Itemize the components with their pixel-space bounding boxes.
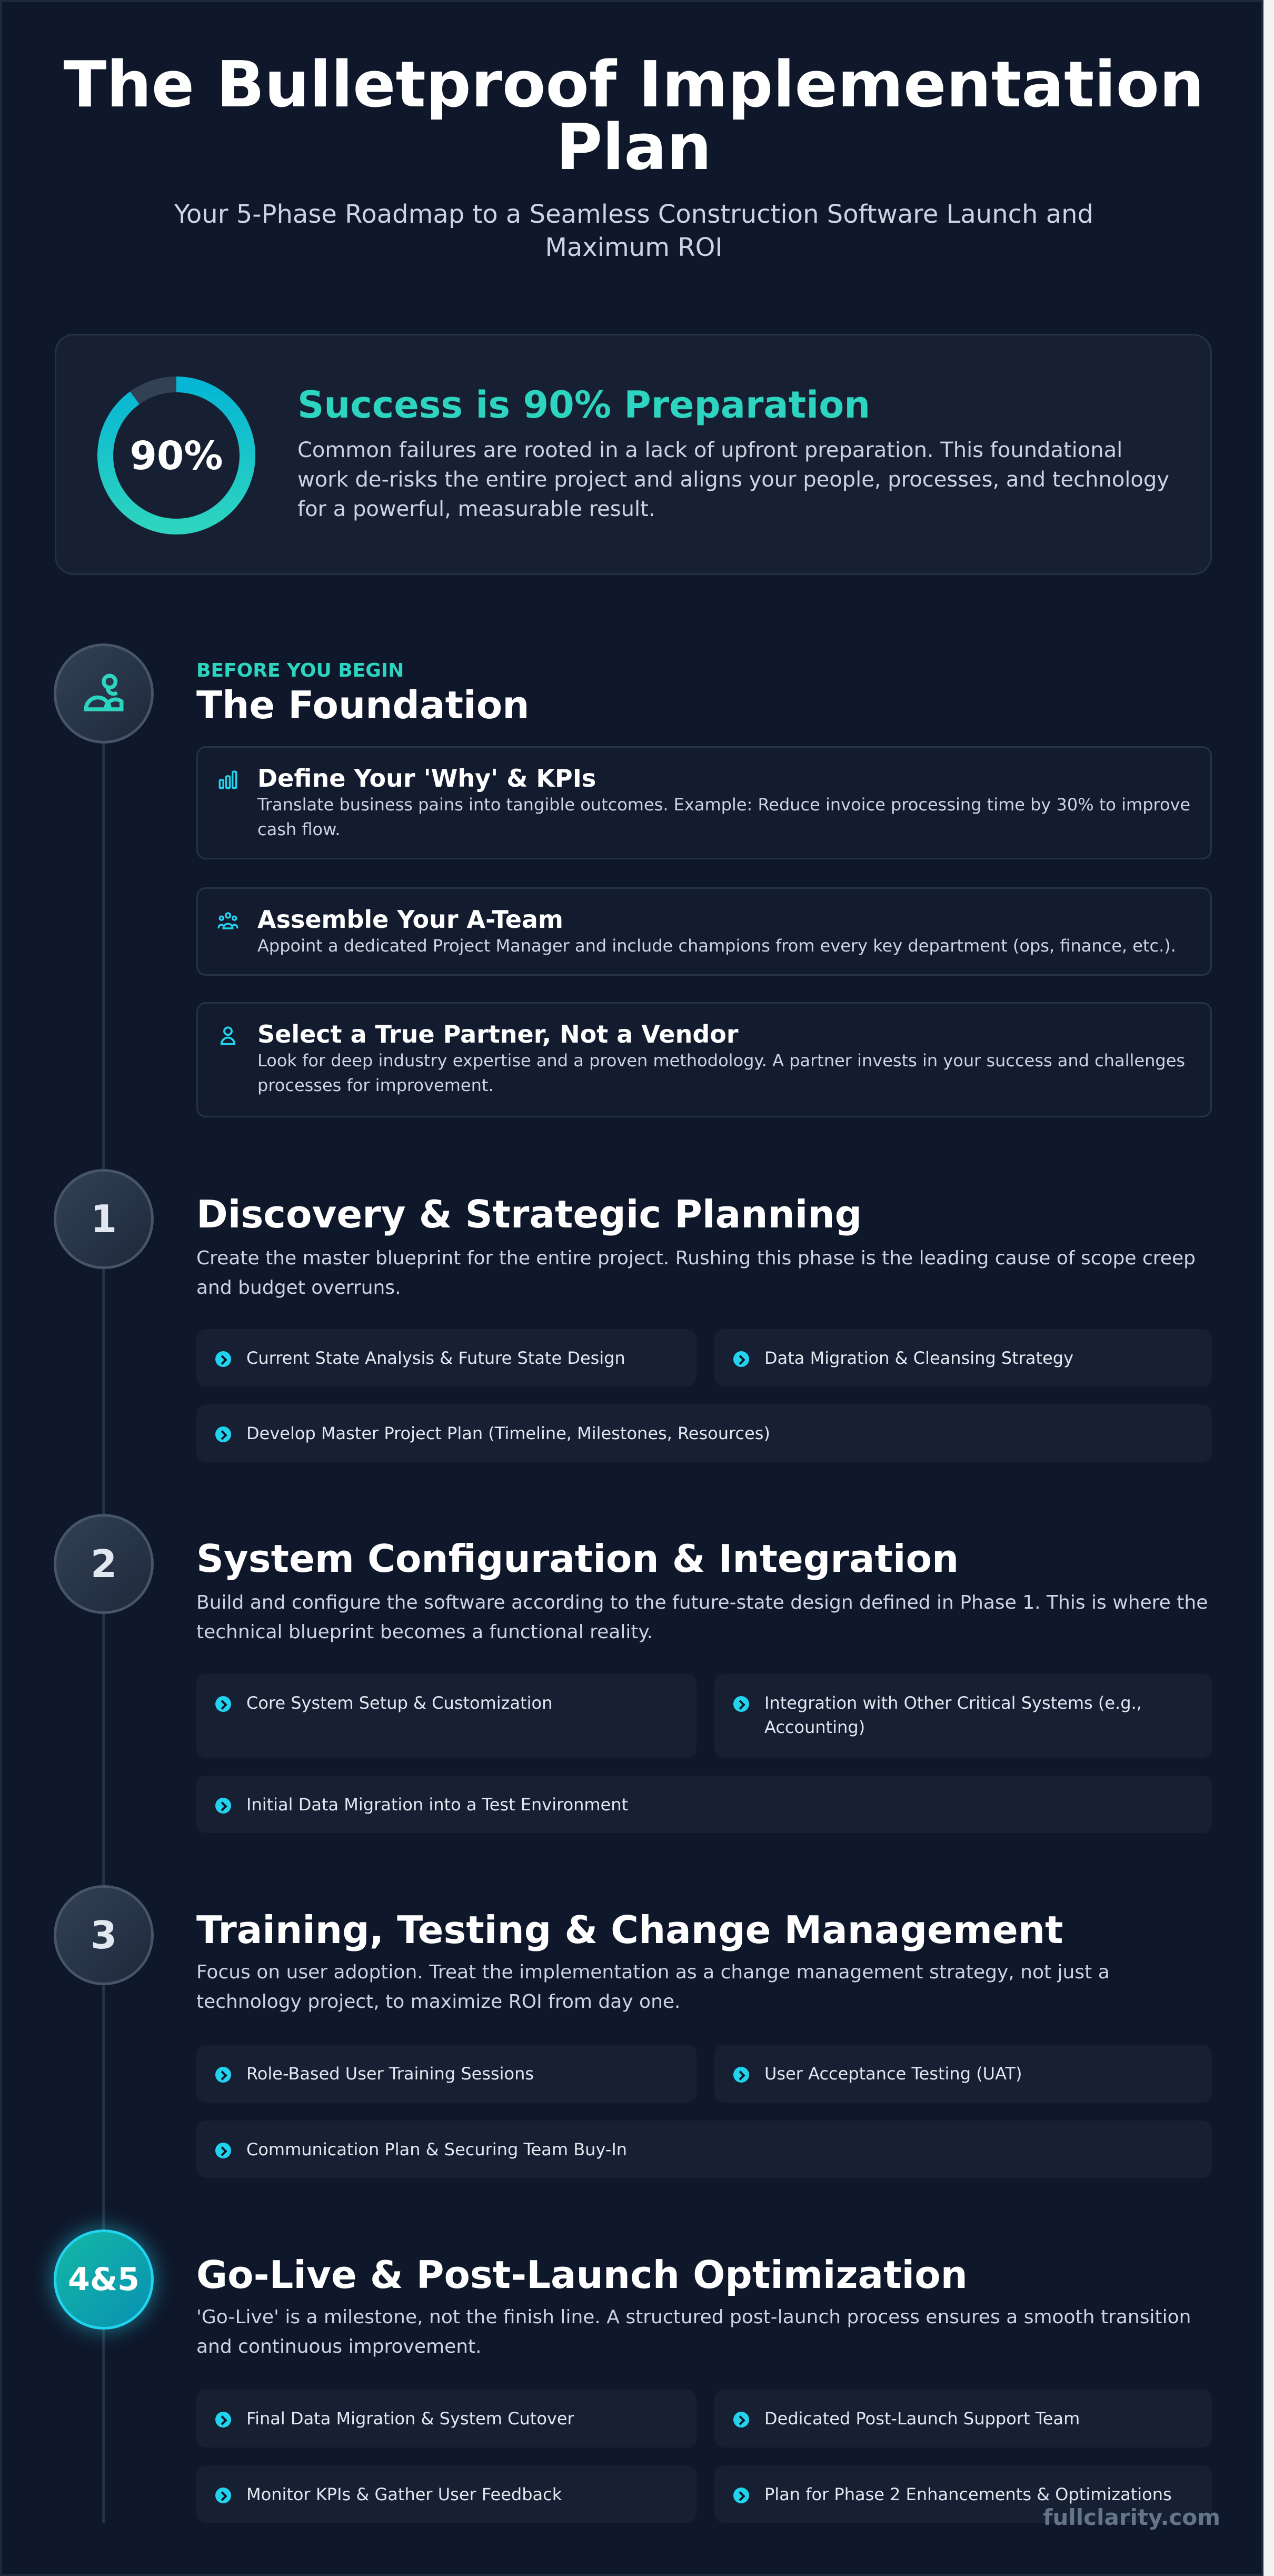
item xyxy=(714,2390,1212,2448)
item xyxy=(196,1329,696,1386)
icon: phase 1 circle xyxy=(54,1169,154,1269)
item: Core System Setup & Customization xyxy=(246,1693,552,1713)
item xyxy=(196,1404,1212,1462)
subtitle: Your 5-Phase Roadmap to a Seamless Construction Software Launch and Maximum ROI xyxy=(174,200,1093,262)
card: partner: Select a True Partner, Not a Vendor xyxy=(257,1020,739,1048)
card heading: Success is 90% Preparation xyxy=(297,383,870,427)
item xyxy=(714,1329,1212,1386)
panel: success card xyxy=(55,334,1212,575)
item: Dedicated Post-Launch Support Team xyxy=(764,2409,1080,2429)
label: before you begin: BEFORE YOU BEGIN xyxy=(196,660,404,681)
item: Current State Analysis & Future State Design xyxy=(246,1348,625,1368)
card: define why: Define Your 'Why' & KPIs xyxy=(257,764,596,792)
description: Create the master blueprint for the entire project. Rushing this phase is the leading cause of scope creep and budget overruns. xyxy=(196,1247,1196,1299)
heading: Training, Testing & Change Management xyxy=(196,1908,1063,1952)
card: define why: Translate business pains into tangible outcomes. Example: Reduce invoice processing time by 30% to improve cash flow. xyxy=(257,795,1190,839)
item xyxy=(196,2121,1212,2178)
icon: phase 4&5 circle xyxy=(54,2230,154,2330)
card: define why xyxy=(196,746,1212,859)
card: partner xyxy=(196,1002,1212,1117)
item xyxy=(196,1674,696,1758)
item: Integration with Other Critical Systems (e.g., Accounting) xyxy=(764,1693,1142,1737)
item: Initial Data Migration into a Test Environment xyxy=(246,1795,628,1815)
item: Final Data Migration & System Cutover xyxy=(246,2409,574,2429)
card body: Common failures are rooted in a lack of upfront preparation. This foundational work de-risks the entire project and aligns your people, processes, and technology for a powerful, measurable result. xyxy=(297,438,1169,521)
title: Plan xyxy=(556,111,712,184)
item xyxy=(196,2045,696,2103)
item xyxy=(714,2045,1212,2103)
item: Monitor KPIs & Gather User Feedback xyxy=(246,2484,562,2504)
phase 4&5 xyxy=(41,2216,1212,2523)
card: a-team: Assemble Your A-Team xyxy=(257,905,563,934)
heading: System Configuration & Integration xyxy=(196,1537,959,1581)
item xyxy=(714,1674,1212,1758)
item: Data Migration & Cleansing Strategy xyxy=(764,1348,1073,1368)
description: 'Go-Live' is a milestone, not the finish line. A structured post-launch process ensures a smooth transition and continuous improvement. xyxy=(196,2306,1191,2357)
item: Develop Master Project Plan (Timeline, Milestones, Resources) xyxy=(246,1423,770,1443)
card: partner: Look for deep industry expertise and a proven methodology. A partner invests in your success and challenges processes for improvement. xyxy=(257,1051,1185,1095)
donut chart 90% xyxy=(97,377,255,534)
icon: foundation circle xyxy=(54,643,154,744)
timeline line xyxy=(102,739,105,2523)
icon: phase 1 circle: 1 xyxy=(91,1197,117,1241)
icon: phase 4&5 circle: 4&5 xyxy=(68,2261,140,2298)
item: Role-Based User Training Sessions xyxy=(246,2064,534,2084)
item: Plan for Phase 2 Enhancements & Optimizations xyxy=(764,2484,1172,2504)
item: User Acceptance Testing (UAT) xyxy=(764,2064,1022,2084)
icon: phase 2 circle: 2 xyxy=(91,1542,117,1586)
donut chart 90%: 90% xyxy=(130,433,223,479)
heading: foundation: The Foundation xyxy=(196,683,529,727)
icon: phase 3 circle xyxy=(54,1885,154,1985)
item xyxy=(196,2465,696,2523)
heading: Discovery & Strategic Planning xyxy=(196,1192,862,1236)
icon: phase 3 circle: 3 xyxy=(91,1913,117,1957)
description: Focus on user adoption. Treat the implementation as a change management strategy, not just a technology project, to maximize ROI from day one. xyxy=(196,1961,1110,2013)
phase 2 xyxy=(54,1514,1212,1833)
description: Build and configure the software according to the future-state design defined in Phase 1. This is where the technical blueprint becomes a functional reality. xyxy=(196,1592,1208,1643)
card: a-team: Appoint a dedicated Project Manager and include champions from every key department (ops, finance, etc.). xyxy=(257,936,1176,956)
phase 1 xyxy=(54,1169,1212,1462)
item xyxy=(196,1776,1212,1833)
item xyxy=(714,2465,1212,2523)
phase 3 xyxy=(54,1885,1212,2178)
title: The Bulletproof Implementation xyxy=(63,48,1204,122)
item: Communication Plan & Securing Team Buy-In xyxy=(246,2139,627,2159)
item xyxy=(196,2390,696,2448)
watermark: fullclarity.com xyxy=(1043,2504,1220,2530)
icon: phase 2 circle xyxy=(54,1514,154,1614)
card: a-team xyxy=(196,887,1212,976)
heading: Go-Live & Post-Launch Optimization xyxy=(196,2253,968,2297)
title xyxy=(63,48,1204,184)
